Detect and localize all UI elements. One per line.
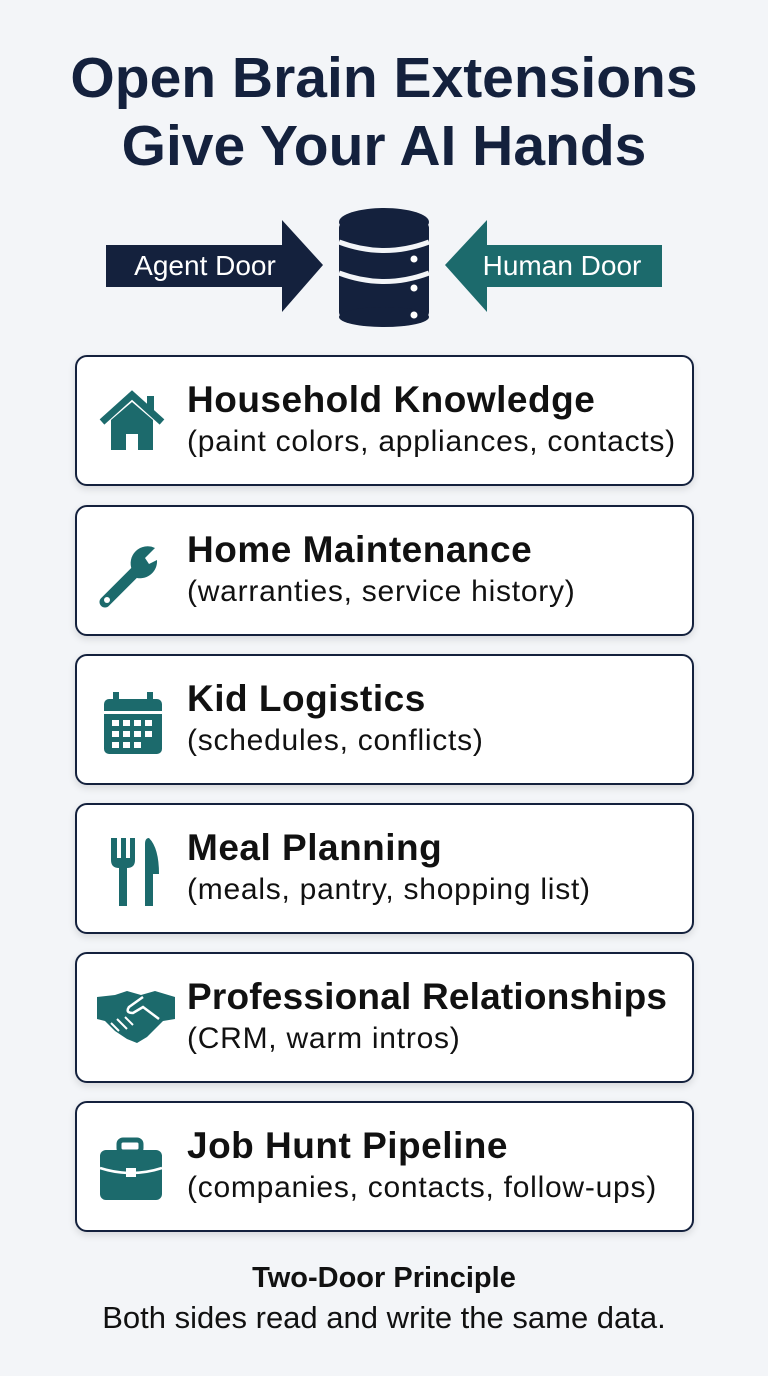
icon: fork and knife: [111, 838, 159, 906]
icon: wrench: [100, 546, 158, 608]
title: Open Brain Extensions: [70, 46, 698, 110]
icon: handshake: [97, 991, 175, 1043]
title: [70, 46, 698, 178]
card: home maintenance: Home Maintenance: [187, 529, 532, 570]
arrow: human door: [445, 220, 662, 312]
card: home maintenance: [75, 505, 694, 636]
card: meal planning: [75, 803, 694, 934]
card: kid logistics: [75, 654, 694, 785]
card: meal planning: (meals, pantry, shopping list): [187, 873, 591, 906]
card: job hunt pipeline: [75, 1101, 694, 1232]
card: professional relationships: Professional Relationships: [187, 976, 667, 1017]
card: professional relationships: [75, 952, 694, 1083]
icon: database: [339, 208, 429, 327]
arrow: agent door: Agent Door: [134, 250, 276, 281]
diagram: two doors: [106, 208, 662, 327]
arrow: agent door: [106, 220, 323, 312]
footer: two-door principle: [102, 1262, 666, 1335]
footer: two-door principle: Both sides read and write the same data.: [102, 1300, 666, 1335]
card: household knowledge: [75, 355, 694, 486]
card: home maintenance: (warranties, service history): [187, 575, 576, 608]
card: household knowledge: Household Knowledge: [187, 379, 595, 420]
card: kid logistics: (schedules, conflicts): [187, 724, 484, 757]
icon: briefcase: [100, 1138, 162, 1200]
icon: calendar: [104, 692, 162, 754]
card: kid logistics: Kid Logistics: [187, 678, 426, 719]
card: household knowledge: (paint colors, appliances, contacts): [187, 425, 676, 458]
card: meal planning: Meal Planning: [187, 827, 442, 868]
card: professional relationships: (CRM, warm intros): [187, 1022, 460, 1055]
title: Give Your AI Hands: [122, 114, 646, 178]
card: job hunt pipeline: (companies, contacts, follow-ups): [187, 1171, 657, 1204]
icon: house: [100, 390, 164, 450]
arrow: human door: Human Door: [483, 250, 641, 281]
footer: two-door principle: Two-Door Principle: [252, 1262, 516, 1294]
card: job hunt pipeline: Job Hunt Pipeline: [187, 1125, 508, 1166]
